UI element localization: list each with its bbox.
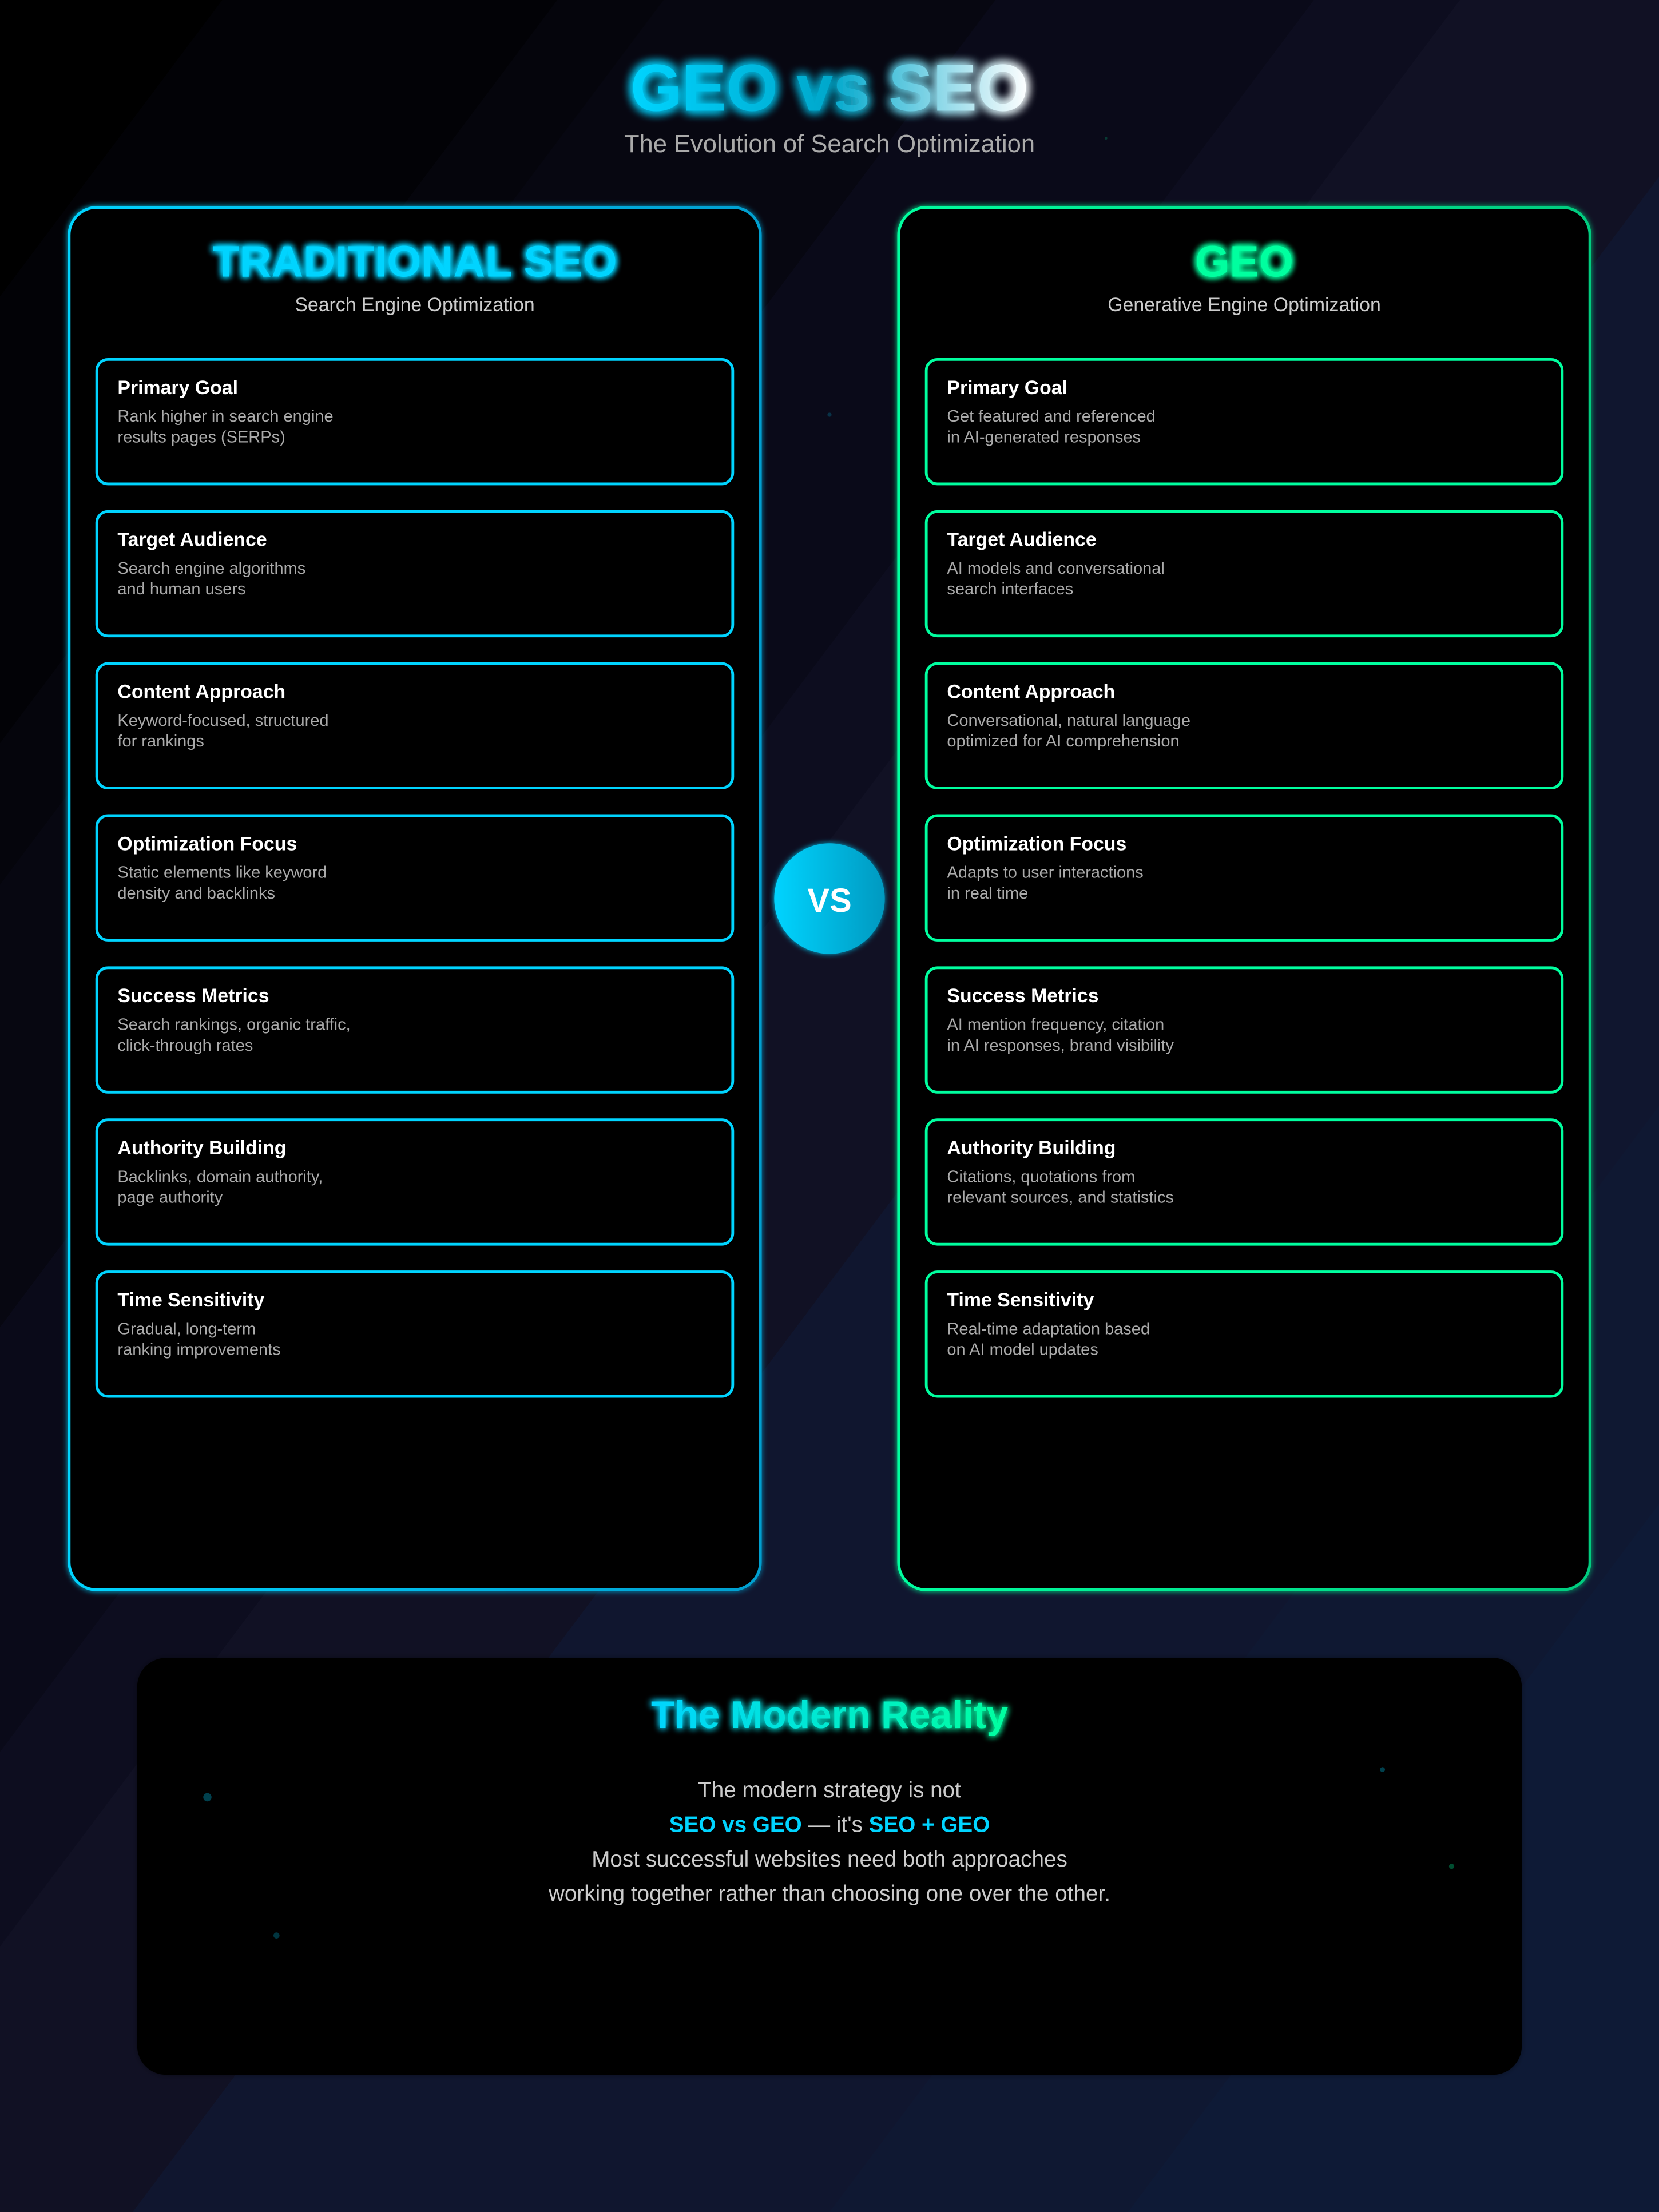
card: content approach: optimized for AI comprehension bbox=[947, 732, 1180, 750]
card: authority building bbox=[97, 1120, 733, 1244]
card: authority building bbox=[926, 1120, 1562, 1244]
card: authority building: Citations, quotations from bbox=[947, 1167, 1135, 1186]
card: time sensitivity: ranking improvements bbox=[117, 1341, 281, 1359]
card: time sensitivity: Time Sensitivity bbox=[947, 1289, 1094, 1311]
card: content approach: for rankings bbox=[117, 732, 204, 750]
card: primary goal: Rank higher in search engine bbox=[117, 407, 334, 426]
body text: working together rather than choosing one over the other. bbox=[548, 1881, 1110, 1906]
card: content approach bbox=[97, 664, 733, 788]
badge label: VS bbox=[807, 882, 852, 919]
card: content approach: Conversational, natural language bbox=[947, 712, 1190, 730]
card: optimization focus: Optimization Focus bbox=[947, 833, 1126, 855]
card: authority building: Authority Building bbox=[947, 1137, 1116, 1159]
particle dots bbox=[203, 1767, 1454, 1939]
card: primary goal: Primary Goal bbox=[947, 377, 1067, 399]
card: time sensitivity bbox=[97, 1272, 733, 1396]
card: target audience: search interfaces bbox=[947, 580, 1073, 598]
subtitle: The Evolution of Search Optimization bbox=[624, 130, 1035, 158]
card: authority building: Authority Building bbox=[117, 1137, 286, 1159]
panel: GEO bbox=[899, 208, 1590, 1590]
card: primary goal: results pages (SERPs) bbox=[117, 428, 285, 446]
card: optimization focus bbox=[926, 816, 1562, 940]
card: content approach: Content Approach bbox=[117, 681, 285, 703]
card: optimization focus: Adapts to user interactions bbox=[947, 864, 1144, 882]
card: optimization focus: density and backlinks bbox=[117, 884, 275, 903]
title: GEO vs SEO bbox=[630, 50, 1029, 125]
body text: SEO vs GEO — it's SEO + GEO bbox=[669, 1812, 990, 1837]
panel: the modern reality bbox=[138, 1659, 1521, 2074]
card: primary goal: Primary Goal bbox=[117, 377, 238, 399]
card: time sensitivity: Gradual, long-term bbox=[117, 1320, 256, 1338]
card: optimization focus: Optimization Focus bbox=[117, 833, 297, 855]
card: time sensitivity: Real-time adaptation based bbox=[947, 1320, 1150, 1338]
card: primary goal bbox=[97, 359, 733, 484]
panel heading: The Modern Reality bbox=[651, 1694, 1008, 1737]
card: target audience: AI models and conversational bbox=[947, 559, 1165, 578]
panel frame bbox=[899, 208, 1590, 1590]
card: target audience: Target Audience bbox=[117, 529, 267, 551]
card: success metrics bbox=[97, 968, 733, 1092]
card: content approach bbox=[926, 664, 1562, 788]
card: authority building: relevant sources, and statistics bbox=[947, 1189, 1174, 1207]
panel frame bbox=[138, 1659, 1521, 2074]
card: success metrics bbox=[926, 968, 1562, 1092]
card: optimization focus: in real time bbox=[947, 884, 1028, 903]
card: primary goal: Get featured and referenced bbox=[947, 407, 1156, 426]
card: authority building: Backlinks, domain authority, bbox=[117, 1167, 323, 1186]
card: target audience: Search engine algorithms bbox=[117, 559, 305, 578]
VS badge bbox=[774, 843, 885, 954]
badge circle bbox=[774, 843, 885, 954]
body text: Most successful websites need both approaches bbox=[592, 1847, 1067, 1872]
panel heading: TRADITIONAL SEO bbox=[212, 237, 617, 286]
card: time sensitivity: on AI model updates bbox=[947, 1341, 1098, 1359]
panel frame bbox=[69, 208, 760, 1590]
body text bbox=[548, 1778, 1110, 1906]
card: target audience bbox=[926, 511, 1562, 636]
card: optimization focus: Static elements like keyword bbox=[117, 864, 327, 882]
card: target audience bbox=[97, 511, 733, 636]
header bbox=[624, 50, 1035, 158]
particle dot: centre gap bbox=[827, 412, 832, 417]
card: content approach: Content Approach bbox=[947, 681, 1115, 703]
panel subheading: Generative Engine Optimization bbox=[1108, 294, 1381, 316]
card: primary goal: in AI-generated responses bbox=[947, 428, 1141, 446]
card: success metrics: Search rankings, organic traffic, bbox=[117, 1016, 351, 1034]
card: success metrics: in AI responses, brand visibility bbox=[947, 1036, 1174, 1055]
card: time sensitivity: Time Sensitivity bbox=[117, 1289, 265, 1311]
card: primary goal bbox=[926, 359, 1562, 484]
card: target audience: and human users bbox=[117, 580, 246, 598]
body text: The modern strategy is not bbox=[698, 1778, 961, 1802]
card: success metrics: AI mention frequency, citation bbox=[947, 1016, 1164, 1034]
card: success metrics: click-through rates bbox=[117, 1036, 253, 1055]
card: content approach: Keyword-focused, structured bbox=[117, 712, 329, 730]
particle dot: top right of subtitle bbox=[1105, 137, 1108, 140]
card: success metrics: Success Metrics bbox=[947, 985, 1099, 1007]
panel subheading: Search Engine Optimization bbox=[295, 294, 535, 316]
card: success metrics: Success Metrics bbox=[117, 985, 269, 1007]
panel heading: GEO bbox=[1195, 237, 1293, 286]
card: optimization focus bbox=[97, 816, 733, 940]
panel: traditional SEO bbox=[69, 208, 760, 1590]
card: time sensitivity bbox=[926, 1272, 1562, 1396]
card: target audience: Target Audience bbox=[947, 529, 1097, 551]
card: authority building: page authority bbox=[117, 1189, 223, 1207]
